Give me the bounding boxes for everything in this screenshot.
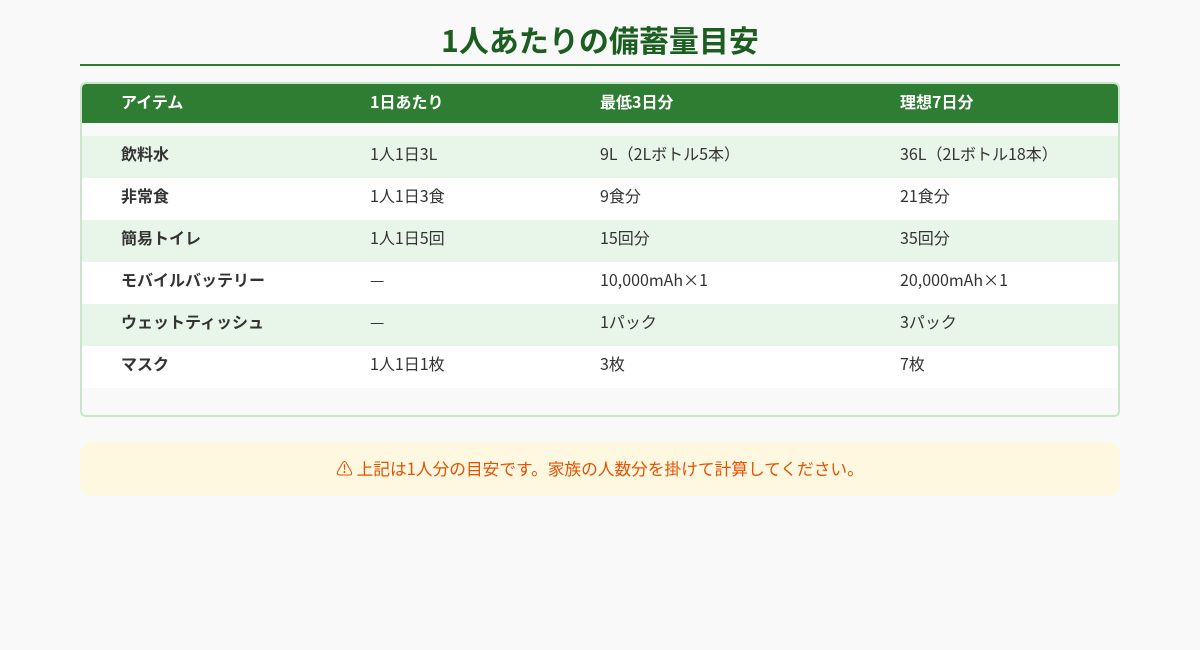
- row: toilet: 1人1日5回: [370, 225, 445, 249]
- row: food: 1人1日3食: [370, 183, 445, 207]
- row: battery: 10,000mAh×1: [600, 267, 708, 291]
- row: toilet: 15回分: [600, 225, 650, 249]
- row: wet tissue: —: [370, 309, 384, 333]
- row: water: 36L（2Lボトル18本）: [900, 141, 1058, 165]
- row: food: 非常食: [121, 183, 169, 207]
- table header: [82, 84, 1118, 123]
- row: mask: 7枚: [900, 351, 925, 375]
- row: water: [82, 136, 1118, 178]
- row: battery: [82, 262, 1118, 304]
- table header: 最低3日分: [600, 89, 673, 113]
- table header: 1日あたり: [370, 89, 443, 113]
- row: toilet: [82, 220, 1118, 262]
- row: wet tissue: ウェットティッシュ: [121, 309, 264, 333]
- table: stockpile amounts: [80, 82, 1120, 417]
- table header: アイテム: [121, 89, 183, 113]
- row: food: [82, 178, 1118, 220]
- title: 1人あたりの備蓄量目安: [441, 17, 759, 61]
- row: wet tissue: 3パック: [900, 309, 957, 333]
- row: toilet: 簡易トイレ: [121, 225, 201, 249]
- row: mask: マスク: [121, 351, 169, 375]
- row: mask: [82, 346, 1118, 388]
- row: mask: 1人1日1枚: [370, 351, 445, 375]
- row: toilet: 35回分: [900, 225, 950, 249]
- row: battery: モバイルバッテリー: [121, 267, 265, 291]
- row: battery: 20,000mAh×1: [900, 267, 1008, 291]
- row: water: 9L（2Lボトル5本）: [600, 141, 740, 165]
- callout: note: [80, 442, 1120, 496]
- title: [80, 14, 1120, 66]
- row: food: 9食分: [600, 183, 641, 207]
- table header: 理想7日分: [900, 89, 973, 113]
- row: wet tissue: 1パック: [600, 309, 657, 333]
- callout: note: ⚠ 上記は1人分の目安です。家族の人数分を掛けて計算してください。: [336, 456, 864, 480]
- row: water: 1人1日3L: [370, 141, 437, 165]
- row: battery: —: [370, 267, 384, 291]
- row: wet tissue: [82, 304, 1118, 346]
- row: water: 飲料水: [121, 141, 169, 165]
- row: mask: 3枚: [600, 351, 625, 375]
- row: food: 21食分: [900, 183, 950, 207]
